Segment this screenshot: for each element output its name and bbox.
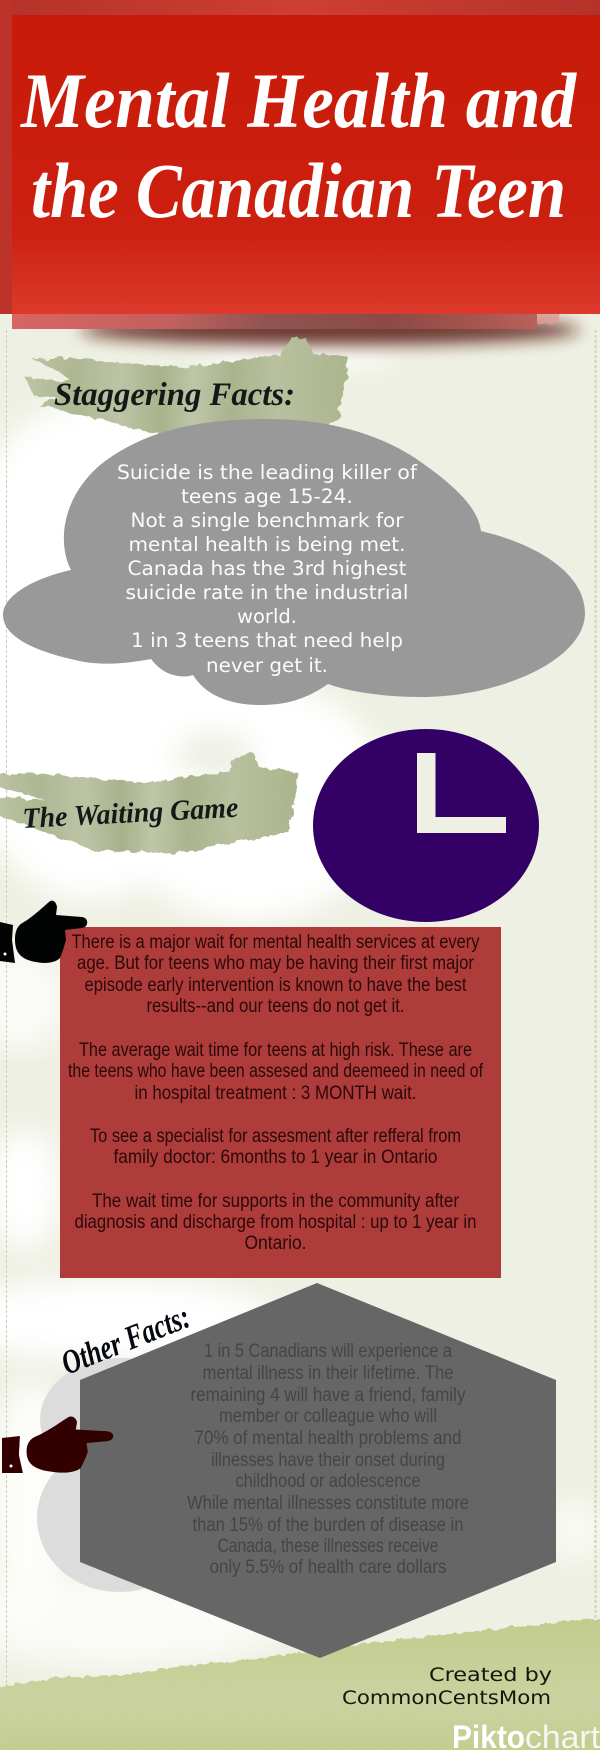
waiting times text: The wait time for supports in the community after: [92, 1191, 460, 1212]
other facts text: illnesses have their onset during: [211, 1450, 445, 1471]
other facts text: 70% of mental health problems and: [194, 1428, 462, 1449]
grey circles behind hexagon: [37, 1358, 201, 1592]
dashed side border right: [594, 330, 596, 1640]
brush stroke: staggering facts: [25, 338, 348, 433]
waiting times text: results--and our teens do not get it.: [146, 996, 404, 1017]
heading: the waiting game: The Waiting Game: [22, 792, 239, 835]
piktochart logo text: [452, 1719, 600, 1750]
paper background washes: [0, 338, 600, 1665]
other facts text: While mental illnesses constitute more: [187, 1493, 469, 1514]
beige wash patch at left: [0, 1060, 62, 1108]
title: [19, 57, 577, 234]
icon: clock: [313, 729, 539, 922]
cloud text: Canada has the 3rd highest: [128, 557, 407, 580]
other facts text: 1 in 5 Canadians will experience a: [204, 1341, 452, 1362]
waiting times text: diagnosis and discharge from hospital : up to 1 year in: [74, 1212, 476, 1233]
credit text: CommonCentsMom: [342, 1687, 551, 1709]
cloud text: Suicide is the leading killer of: [117, 461, 418, 484]
other facts text: member or colleague who will: [219, 1406, 437, 1427]
icon: maroon pointing hand: [2, 1417, 113, 1473]
credit text: [342, 1664, 552, 1709]
waiting times text: There is a major wait for mental health services at every: [72, 932, 480, 953]
brush stroke: waiting game: [0, 753, 298, 853]
waiting times text: The average wait time for teens at high risk. These are: [79, 1040, 472, 1061]
credit text: Created by: [429, 1664, 552, 1686]
waiting times text: age. But for teens who may be having their first major: [77, 953, 475, 974]
other facts text: Canada, these illnesses receive: [218, 1536, 438, 1557]
header panel: [0, 0, 600, 314]
waiting times text: [68, 932, 484, 1254]
bottom green wash: [0, 1618, 600, 1750]
header drop shadow: [80, 315, 580, 345]
icon: black pointing hand: [0, 901, 87, 963]
panel: other facts hexagon: [80, 1283, 556, 1658]
other facts text: [187, 1341, 469, 1578]
cloud text: Not a single benchmark for: [130, 509, 404, 532]
cloud text: mental health is being met.: [128, 533, 406, 556]
heading: staggering facts: Staggering Facts:: [54, 377, 295, 413]
other facts text: childhood or adolescence: [236, 1471, 420, 1492]
waiting times text: family doctor: 6months to 1 year in Ontario: [114, 1147, 438, 1168]
other facts text: remaining 4 will have a friend, family: [190, 1385, 466, 1406]
cloud text: 1 in 3 teens that need help: [131, 629, 403, 652]
cloud text: suicide rate in the industrial: [126, 581, 408, 604]
waiting times text: Ontario.: [244, 1233, 306, 1254]
waiting times text: the teens who have been assesed and deemeed in need of: [68, 1061, 484, 1082]
cloud text: [117, 461, 418, 677]
cloud text: teens age 15-24.: [181, 485, 353, 508]
waiting times text: in hospital treatment : 3 MONTH wait.: [134, 1083, 416, 1104]
waiting times text: To see a specialist for assesment after refferal from: [90, 1126, 461, 1147]
heading: other facts: Other Facts:: [56, 1298, 195, 1382]
other facts text: only 5.5% of health care dollars: [210, 1557, 446, 1578]
waiting times text: episode early intervention is known to have the best: [84, 975, 467, 996]
dashed side border left: [6, 330, 8, 1690]
other facts text: than 15% of the burden of disease in: [192, 1515, 464, 1536]
cloud text: never get it.: [206, 654, 328, 677]
panel: waiting times: [60, 927, 501, 1278]
cloud panel: [3, 419, 585, 705]
torn red strip under header: [12, 312, 559, 329]
cloud text: world.: [237, 605, 297, 628]
other facts text: mental illness in their lifetime. The: [202, 1363, 454, 1384]
